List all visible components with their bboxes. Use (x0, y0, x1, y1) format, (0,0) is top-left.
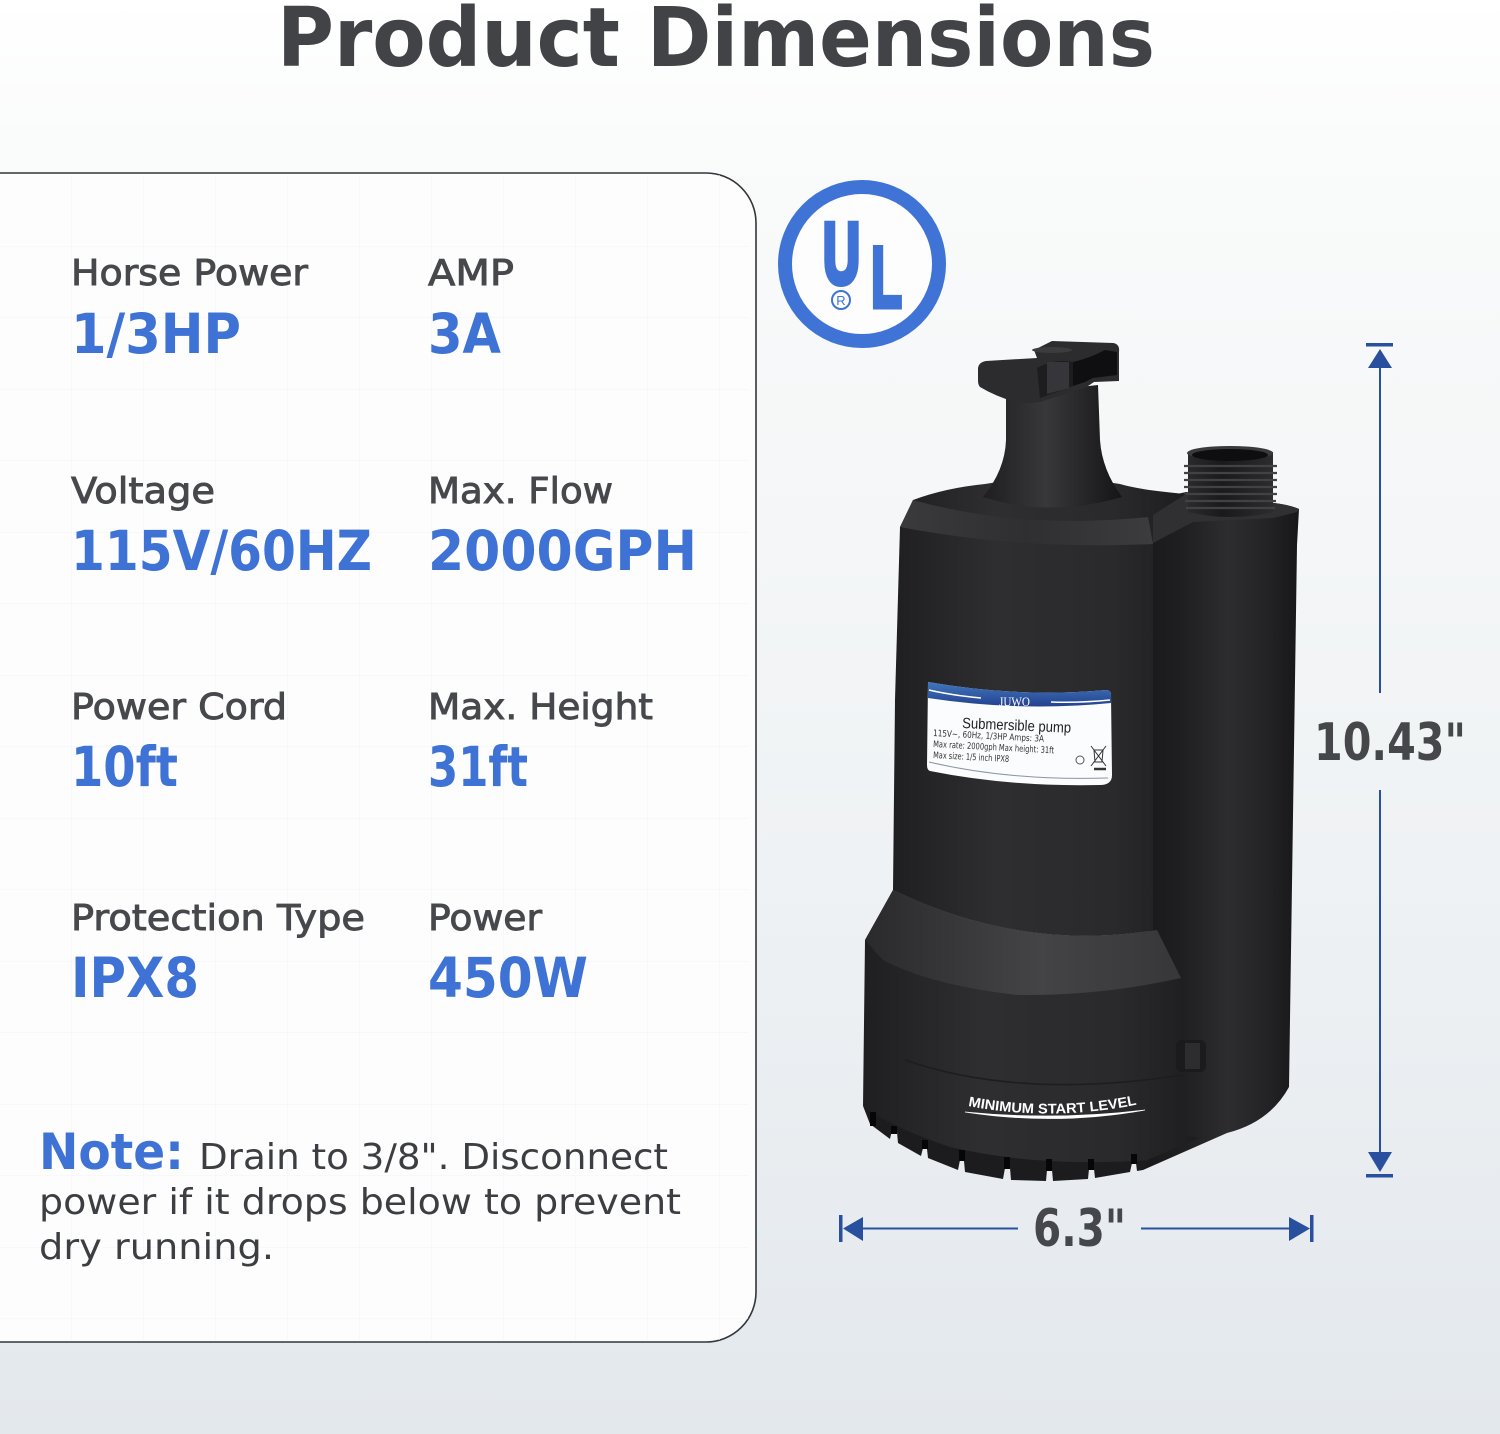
spec: voltage: Voltage (71, 471, 215, 512)
pump: product label (927, 682, 1112, 785)
spec: max height: Max. Height (428, 687, 653, 728)
spec: voltage (71, 471, 372, 583)
spec: protection type (71, 898, 365, 1010)
pump: top neck (983, 385, 1122, 508)
spec: amp: 3A (428, 302, 501, 366)
pump: product label: JUWO (999, 694, 1030, 709)
pump: base housing (863, 890, 1206, 1181)
spec: max height: 31ft (428, 735, 528, 799)
icon: UL certification logo: L (871, 230, 902, 326)
pump: carry handle (978, 341, 1119, 403)
spec: power cord: 10ft (71, 735, 178, 799)
spec: power (428, 898, 588, 1010)
note (39, 1123, 681, 1268)
icon: UL certification logo: R (836, 293, 846, 308)
spec: protection type: IPX8 (71, 946, 199, 1010)
dimension label: 10.43 inches: 10.43" (1314, 713, 1466, 773)
spec: max flow: 2000GPH (428, 519, 697, 583)
pump product (863, 341, 1299, 1181)
spec: amp: AMP (428, 253, 514, 294)
pump: base chamfer (865, 890, 1181, 995)
pump: top chamfer ring (900, 500, 1153, 545)
spec: power: Power (428, 898, 542, 939)
spec: max height (428, 687, 653, 799)
spec: power cord: Power Cord (71, 687, 287, 728)
pump: product label: Submersible pump (962, 715, 1071, 737)
pump: side discharge column (1143, 492, 1299, 1170)
spec: voltage: 115V/60HZ (71, 519, 372, 583)
pump: product label: Max rate: 2000gph Max height: 31ft (933, 740, 1055, 756)
spec: power cord (71, 687, 287, 799)
pump: float switch tab (1176, 1040, 1206, 1072)
note: dry running. (39, 1227, 274, 1268)
note: Note: (39, 1123, 184, 1181)
spec: amp (428, 253, 514, 366)
pump: main motor body (893, 478, 1186, 936)
icon: UL certification logo (785, 187, 939, 341)
spec: horse power (71, 253, 308, 366)
pump: product label: 115V~, 60Hz, 1/3HP Amps: 3A (933, 729, 1045, 745)
panel: specifications (0, 173, 756, 1342)
pump: minimum start level marking: MINIMUM START LEVEL (969, 1096, 1136, 1114)
spec: horse power: Horse Power (71, 253, 308, 294)
spec: horse power: 1/3HP (71, 302, 241, 366)
spec: max flow: Max. Flow (428, 471, 613, 512)
spec: max flow (428, 471, 697, 583)
pump: column top ledge (1150, 493, 1299, 543)
dimension arrow: height 10.43 inches (1366, 343, 1393, 1178)
dimension arrow: width 6.3 inches (839, 1215, 1314, 1242)
note: power if it drops below to prevent (39, 1182, 681, 1223)
pump: bottom teeth (863, 1106, 1150, 1181)
spec: power: 450W (428, 946, 588, 1010)
pump: outlet thread (1184, 446, 1277, 517)
note: Drain to 3/8". Disconnect (199, 1137, 668, 1178)
icon: UL certification logo: U (823, 206, 860, 302)
spec: protection type: Protection Type (71, 898, 365, 939)
pump: product label: Max size: 1/5 inch IPX8 (933, 751, 1009, 765)
dimension label: 6.3 inches: 6.3" (1033, 1199, 1126, 1259)
